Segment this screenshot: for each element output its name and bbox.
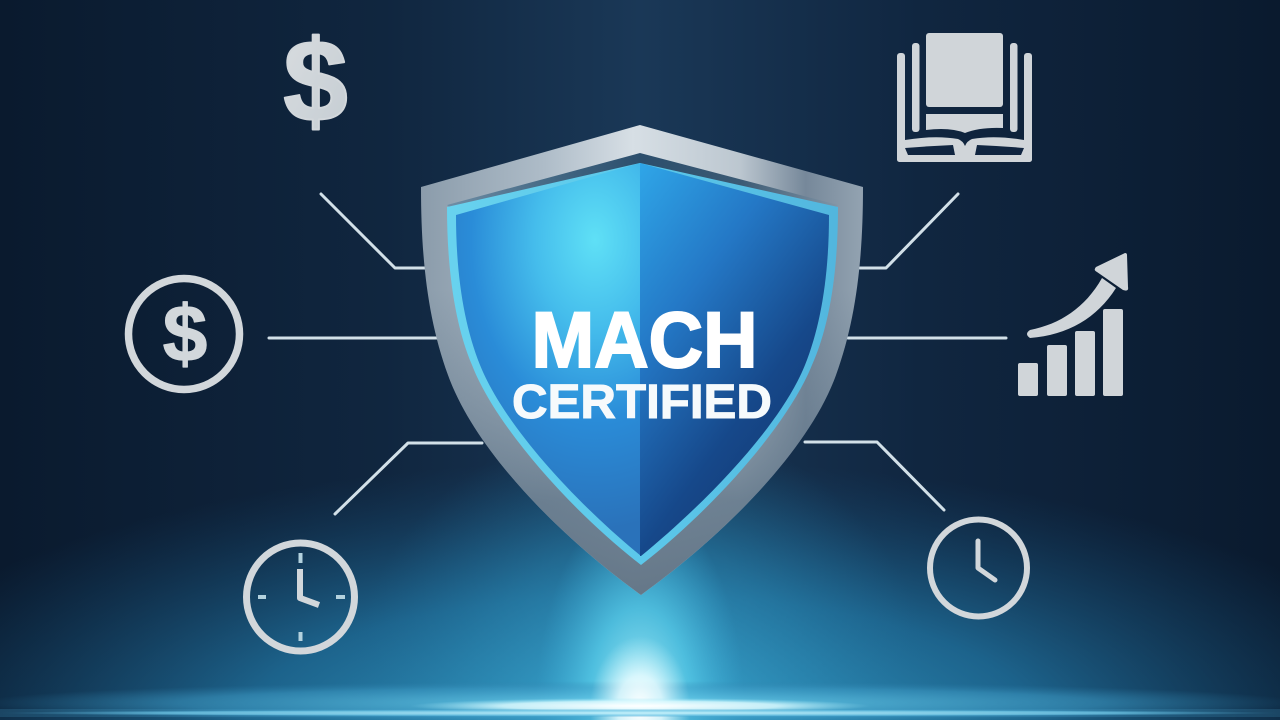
- shield: dark channel: [447, 153, 838, 214]
- icon: dollar coin: $: [163, 289, 207, 378]
- icon: dollar coin: [128, 278, 240, 390]
- icon: growth chart: [1018, 253, 1128, 396]
- title: MACH: MACH: [532, 295, 758, 384]
- connector lines: [269, 194, 1006, 514]
- icon: simple clock: [930, 520, 1027, 616]
- subtitle: CERTIFIED: CERTIFIED: [512, 376, 772, 429]
- icon: clock with ticks: [246, 543, 354, 651]
- shield: silver frame: [421, 125, 863, 595]
- shield: frame shading: [421, 125, 863, 595]
- shield: left blue face: [456, 163, 641, 556]
- icon: dollar sign: $: [283, 16, 348, 146]
- shield: [421, 125, 863, 595]
- shield: right blue face: [640, 163, 829, 556]
- shield: cyan rim: [447, 163, 838, 565]
- icon: open book: [897, 33, 1032, 162]
